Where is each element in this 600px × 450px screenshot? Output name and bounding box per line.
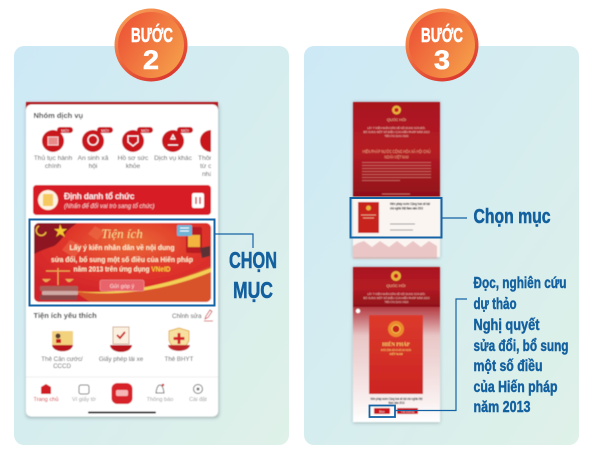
document card: Hiến pháp nước Cộng hoà xã hội: [390, 202, 430, 206]
label: reading instructions: [474, 275, 568, 416]
panel: step 2 background: [14, 46, 289, 445]
icon: health insurance: [168, 328, 190, 351]
service labels: An sinh xã: [78, 155, 109, 162]
badge: step 3: BƯỚC: [421, 23, 463, 47]
service labels: [34, 152, 217, 178]
caption: Nam năm 2013: [388, 401, 405, 405]
page title: NGHĨA VIỆT NAM: [384, 154, 409, 160]
highlight box: read button: [370, 406, 395, 417]
constitution book: [369, 315, 423, 394]
link: Chỉnh sửa: [172, 310, 213, 321]
service labels: nhà: [202, 171, 213, 178]
buttons: Tải xuống: [401, 410, 414, 414]
icon: scales and books: [40, 268, 78, 300]
nav: scan button: [112, 383, 132, 404]
buttons: Đọc: [379, 410, 385, 414]
intro text: LẤY Ý KIẾN NHÂN DÂN VỀ NỘI DUNG SỬA ĐỔI,: [368, 125, 426, 130]
icon: ID card: [52, 331, 73, 351]
document card: chủ nghĩa Việt Nam năm 2013: [390, 206, 423, 210]
card: Định danh tổ chức: (Nhấn để đổi vai trò sang tổ chức): [64, 203, 155, 210]
nav: Ví giấy tờ: [72, 385, 96, 403]
phone screenshot: VNeID app: [26, 102, 219, 418]
nav: Thông báo: [147, 384, 173, 403]
banner text: Lấy ý kiến nhân dân về nội dung: [70, 243, 175, 252]
nav: Cài đặt: [189, 384, 207, 403]
page footer pattern: [353, 241, 437, 259]
emblem: [387, 106, 406, 122]
badge: step 3: [406, 8, 478, 82]
service icons row: MỚI: [61, 128, 69, 133]
label: CHỌN MỤC: [229, 247, 277, 303]
banner text: năm 2013 trên ứng dụng VNeID: [74, 264, 171, 274]
icon: phone and chat bubble: [177, 225, 210, 258]
emblem: [386, 271, 406, 288]
service labels: Thủ tục hành: [34, 154, 73, 162]
service labels: Hồ sơ sức: [118, 153, 149, 162]
service icons row: MỚI: [101, 128, 109, 133]
intro text: BỔ SUNG MỘT SỐ ĐIỀU CỦA HIẾN PHÁP NĂM 2013: [364, 295, 430, 300]
body text lines: [362, 162, 431, 180]
link: Chỉnh sửa: Chỉnh sửa: [172, 312, 202, 320]
label: reading instructions: một số điều: [474, 358, 542, 375]
intro text: LẤY Ý KIẾN NHÂN DÂN VỀ NỘI DUNG SỬA ĐỔI,: [368, 291, 426, 296]
favourite icons: [52, 327, 190, 352]
label: reading instructions: năm 2013: [474, 399, 531, 416]
screenshot: constitution detail page: [353, 267, 440, 423]
intro text: [364, 291, 430, 304]
nav: Trang chủ: Trang chủ: [34, 396, 58, 403]
label: CHỌN MỤC: CHỌN: [229, 247, 277, 273]
banner text: [51, 243, 193, 274]
label: reading instructions: Đọc, nghiên cứu: [474, 275, 566, 292]
label: reading instructions: dự thảo: [474, 296, 517, 313]
intro text: BỔ SUNG MỘT SỐ ĐIỀU CỦA HIẾN PHÁP NĂM 2013: [364, 129, 430, 134]
service icons row: [42, 127, 211, 152]
screenshot: National Assembly page list: [353, 102, 440, 259]
emblem: QUỐC HỘI: [387, 117, 406, 122]
caption: [370, 397, 423, 405]
nav: Trang chủ: [34, 384, 58, 403]
service labels: từ cơ: [200, 163, 216, 170]
favourite labels: Thẻ Căn cước/: [41, 356, 83, 363]
service labels: Dịch vụ khác: [154, 155, 193, 162]
card: Định danh tổ chức: [33, 185, 211, 215]
document card: [358, 202, 430, 233]
banner text: sửa đổi, bổ sung một số điều của Hiến pháp: [51, 255, 193, 264]
badge: step 3: 3: [434, 45, 450, 75]
button: Gửi góp ý: [100, 280, 144, 291]
heading: Nhóm dịch vụ: Nhóm dịch vụ: [34, 111, 84, 120]
label: reading instructions: Nghị quyết: [474, 317, 540, 334]
heading: Tiện ích yêu thích: Tiện ích yêu thích: [34, 311, 97, 320]
connector: read button to label: [395, 299, 467, 410]
constitution book: HIẾN PHÁP: [382, 342, 410, 348]
banner: Tiện ích: [34, 223, 211, 302]
service labels: khỏe: [126, 162, 140, 170]
service labels: chính: [45, 163, 61, 170]
connector: banner to Chọn mục: [215, 234, 253, 248]
badge: step 2: 2: [143, 45, 159, 75]
icon: driving licence: [110, 327, 132, 352]
connector: card to label: [442, 217, 467, 219]
panel: step 3 background: [304, 46, 579, 445]
nav: Cài đặt: Cài đặt: [189, 397, 207, 403]
buttons: [374, 408, 418, 414]
badge: step 2: [114, 8, 188, 82]
service labels: Thôn: [198, 155, 213, 162]
service icons row: MỚI: [181, 128, 189, 133]
bottom navigation: [26, 377, 218, 414]
badge: step 2: BƯỚC: [131, 23, 173, 47]
nav: Thông báo: Thông báo: [147, 397, 173, 403]
favourite labels: [41, 356, 194, 370]
nav: Ví giấy tờ: Ví giấy tờ: [72, 397, 96, 403]
favourite labels: Giấy phép lái xe: [99, 356, 144, 363]
back dot: [356, 309, 360, 313]
emblem: QUỐC HỘI: [386, 283, 406, 288]
label: reading instructions: sửa đổi, bổ sung: [474, 337, 568, 355]
button: Gửi góp ý: Gửi góp ý: [110, 283, 134, 290]
service labels: hội: [89, 163, 98, 170]
favourite labels: CCCD: [53, 363, 71, 370]
page title: [362, 149, 430, 160]
label: reading instructions: của Hiến pháp: [474, 379, 558, 396]
page title: HIẾN PHÁP NƯỚC CỘNG HÒA XÃ HỘI CHỦ: [362, 149, 430, 154]
constitution book: NƯỚC CỘNG HÒA XÃ HỘI CHỦ NGHĨA: [381, 347, 411, 352]
label: CHỌN MỤC: MỤC: [233, 277, 273, 303]
highlight box: banner: [30, 220, 214, 306]
highlight box: document card: [350, 198, 442, 238]
favourite labels: Thẻ BHYT: [165, 356, 194, 363]
intro text: [364, 125, 430, 138]
intro text: TRÊN ỨNG DỤNG VNEID: [384, 133, 408, 138]
intro text: TRÊN ỨNG DỤNG VNEID: [384, 299, 408, 304]
constitution book: VIỆT NAM: [389, 351, 403, 356]
banner title: Tiện ích: [101, 226, 143, 241]
service icons row: MỚI: [141, 128, 149, 133]
label: Chọn mục: Chọn mục: [474, 206, 550, 228]
card: Định danh tổ chức: Định danh tổ chức: [64, 191, 135, 201]
caption: Hiến pháp nước Cộng hoà xã hội chủ nghĩa Việt: [370, 397, 423, 401]
